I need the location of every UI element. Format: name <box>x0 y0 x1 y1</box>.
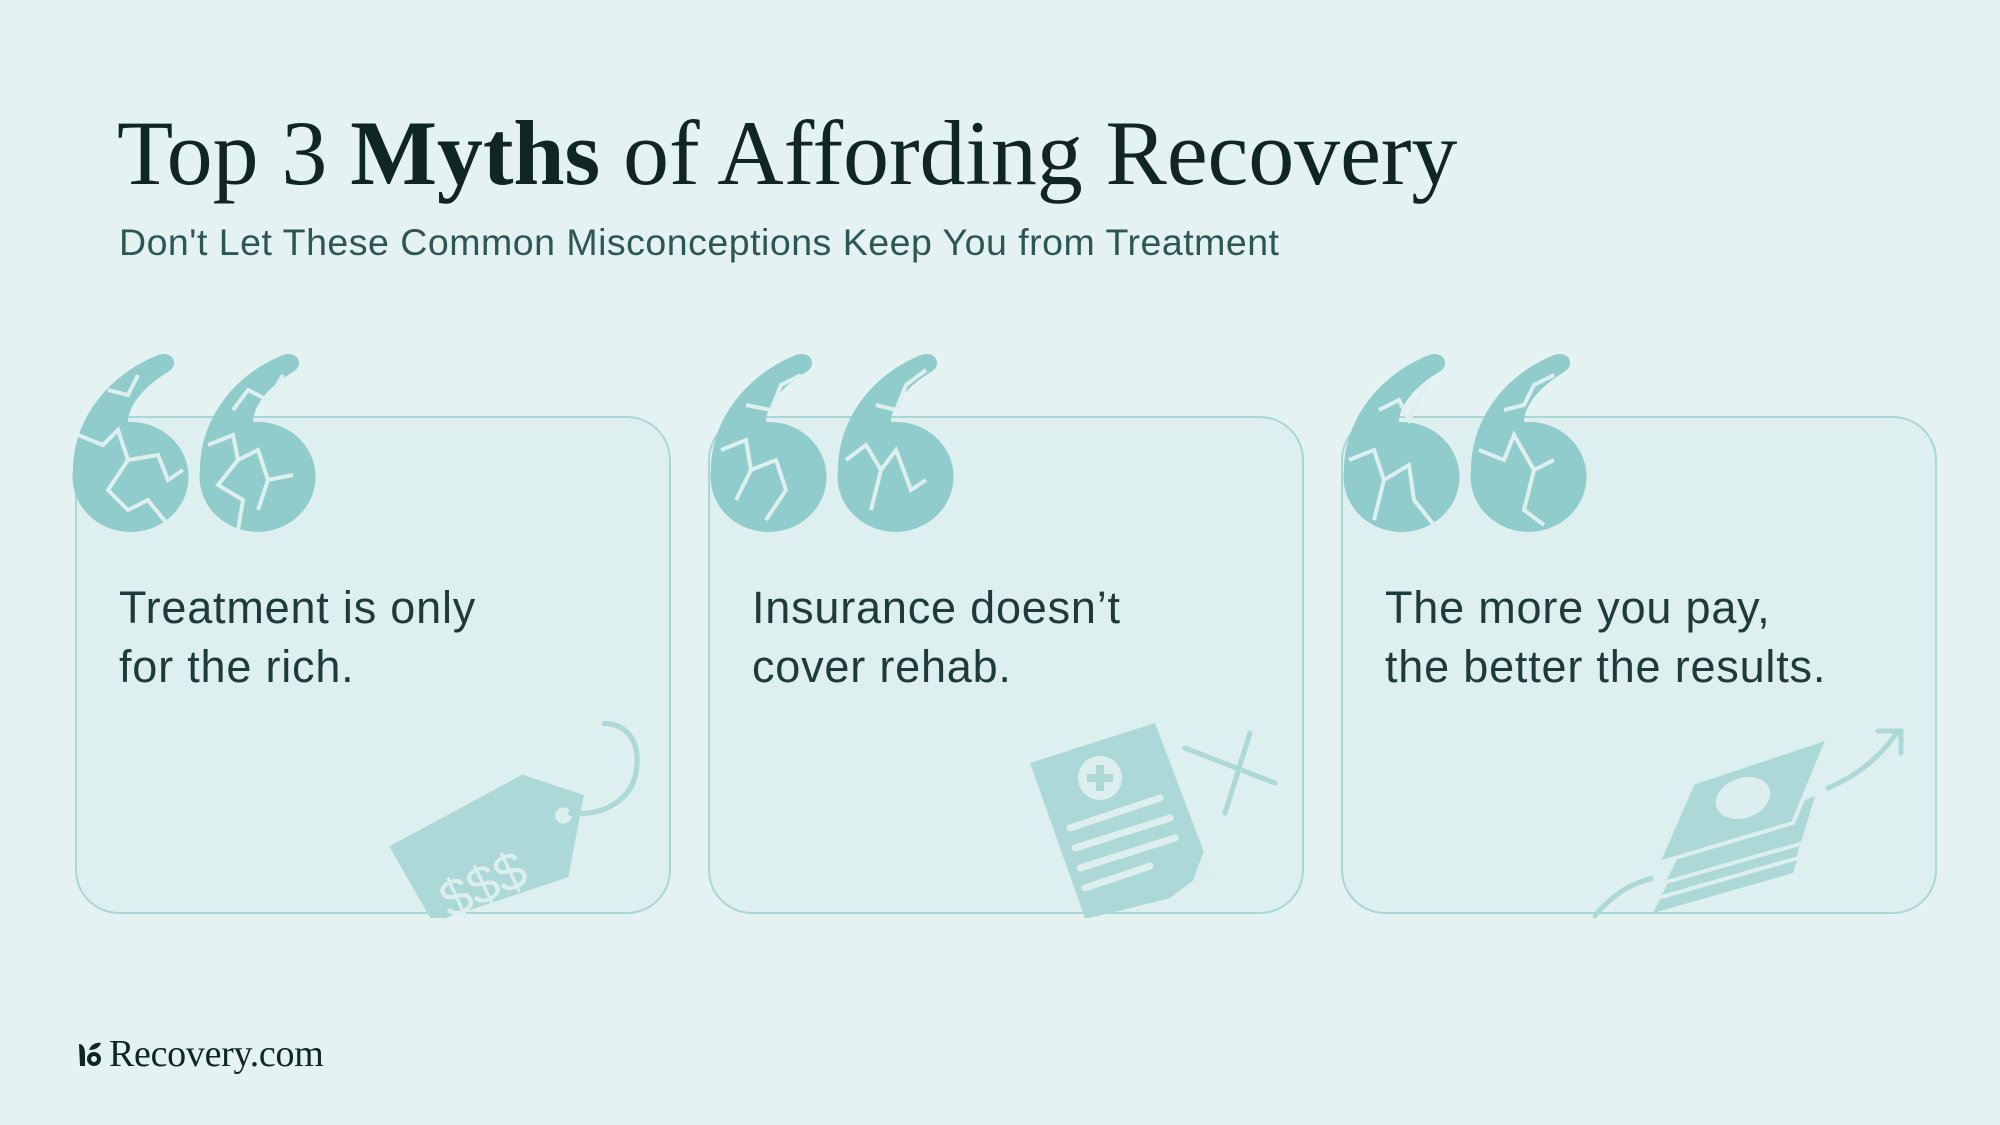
icon: quotes set 2 <box>710 354 954 532</box>
subtitle: Don't Let These Common Misconceptions Keep You from Treatment <box>119 221 1279 263</box>
text: myth 1 <box>119 582 476 692</box>
icon: insurance document with X <box>1030 723 1278 918</box>
text: myth 3: the better the results. <box>1385 641 1826 692</box>
icon: price tag <box>389 720 640 918</box>
icon: money stack with rising arrow <box>1593 728 1904 918</box>
logo: Recovery.com <box>109 1033 323 1075</box>
text: myth 2: cover rehab. <box>752 641 1012 692</box>
icon: logo mark <box>79 1042 101 1066</box>
text: myth 2: Insurance doesn’t <box>752 582 1121 633</box>
panel: myth 1 <box>75 416 671 914</box>
icon: quotes set 3 <box>1344 354 1586 532</box>
panel: myth 2 <box>708 416 1304 914</box>
panel: myth 3 <box>1341 416 1937 914</box>
icon: quotes set 1 <box>72 354 316 532</box>
text: myth 3: The more you pay, <box>1385 582 1770 633</box>
text: myth 2 <box>752 582 1121 692</box>
title: Top 3 Myths of Affording Recovery <box>117 102 1457 204</box>
text: myth 3 <box>1385 582 1826 692</box>
text: myth 1: Treatment is only <box>119 582 476 633</box>
text: myth 1: for the rich. <box>119 641 354 692</box>
